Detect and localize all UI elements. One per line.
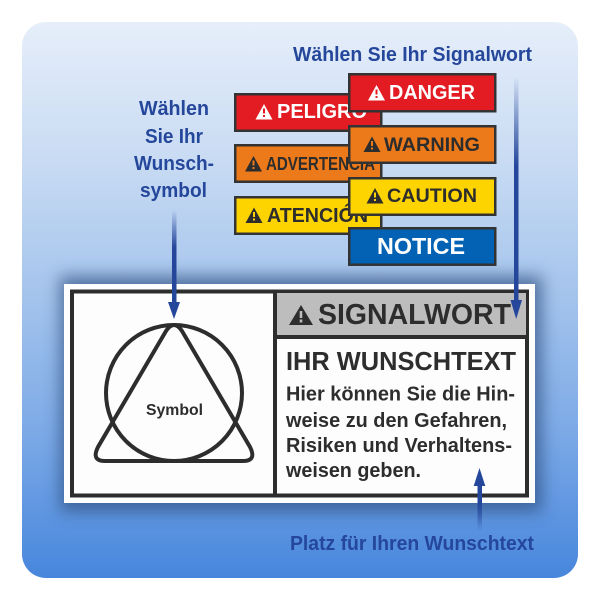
label: NOTICE xyxy=(349,228,495,265)
sign border xyxy=(72,292,527,496)
label: ATENCIÓN xyxy=(235,197,381,234)
signal word header: SIGNALWORT xyxy=(318,299,511,331)
label: CAUTION: CAUTION xyxy=(387,185,477,207)
custom text heading: IHR WUNSCHTEXT xyxy=(286,346,516,376)
label: NOTICE: NOTICE xyxy=(377,233,465,259)
caption: space for custom text: Platz für Ihren Wunschtext xyxy=(290,533,534,555)
heading: choose symbol: Wählen xyxy=(139,98,209,120)
symbol placeholder: Symbol xyxy=(146,402,203,419)
heading: choose signal word: Wählen Sie Ihr Signalwort xyxy=(293,44,532,66)
heading: choose symbol: symbol xyxy=(140,180,207,202)
arrow: to signal word xyxy=(510,76,522,319)
label: DANGER xyxy=(349,74,495,111)
label: CAUTION xyxy=(349,178,495,215)
label: WARNING xyxy=(349,126,495,163)
signal word header xyxy=(273,293,527,339)
label: DANGER: DANGER xyxy=(389,82,476,104)
heading: choose symbol: Wunsch- xyxy=(134,153,214,175)
arrow: to custom text xyxy=(474,468,485,531)
custom text body: Hier können Sie die Hin- xyxy=(286,384,515,406)
label: WARNING: WARNING xyxy=(384,134,480,156)
sign template panel xyxy=(64,284,535,503)
label: PELIGRO xyxy=(235,94,381,131)
custom text body: Risiken und Verhaltens- xyxy=(286,435,512,457)
label: PELIGRO: PELIGRO xyxy=(277,101,367,123)
custom text body xyxy=(285,384,515,482)
heading: choose symbol xyxy=(134,98,214,202)
label: ADVERTENCIA: ADVERTENCIA xyxy=(266,153,375,174)
arrow: to symbol xyxy=(168,210,180,319)
heading: choose symbol: Sie Ihr xyxy=(145,126,203,148)
panel shadow xyxy=(60,276,542,512)
label: ATENCIÓN: ATENCIÓN xyxy=(267,203,368,227)
custom text body: weisen geben. xyxy=(285,460,421,482)
symbol placeholder xyxy=(96,325,252,461)
label: ADVERTENCIA xyxy=(235,145,381,182)
custom text body: weise zu den Gefahren, xyxy=(285,410,507,432)
panel divider xyxy=(273,291,277,496)
